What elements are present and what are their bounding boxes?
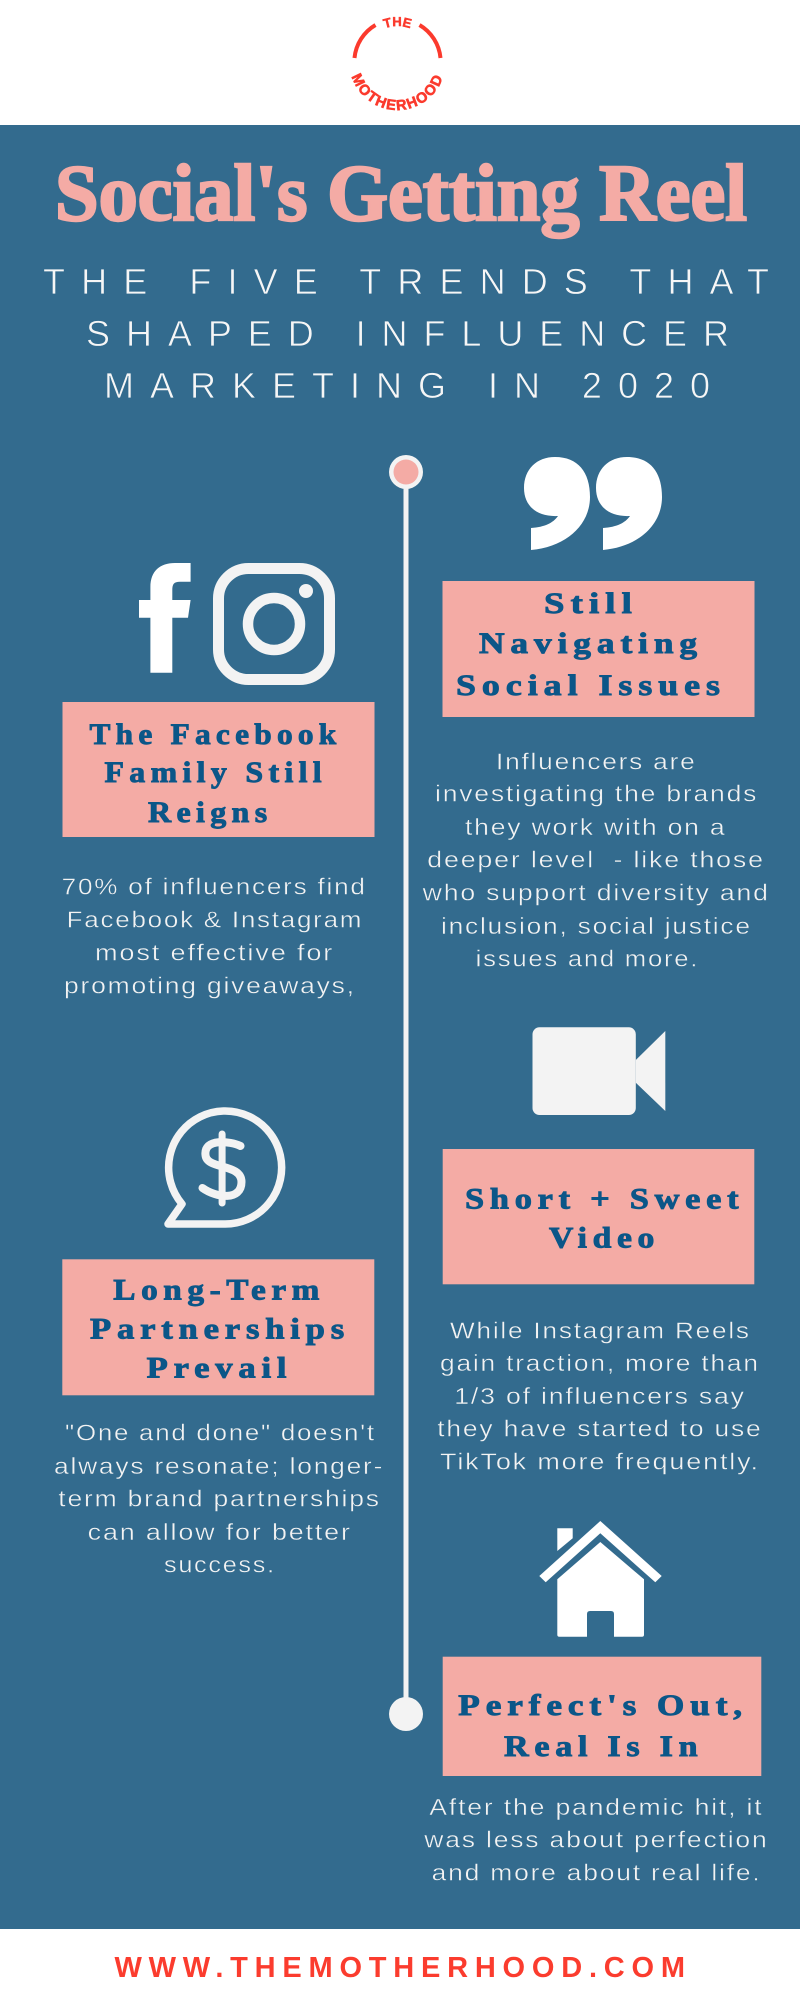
text: partnerships body: "One and done" doesn't — [65, 1420, 376, 1446]
text: Facebook body: 70% of influencers find — [62, 873, 367, 899]
logo: The Motherhood: MOTHERHOOD — [351, 72, 442, 111]
text: social issues body: who support diversity and — [422, 880, 770, 906]
text: real life body: was less about perfection — [423, 1827, 768, 1853]
text: partnerships body: always resonate; longer- — [54, 1453, 384, 1479]
panel: Facebook family — [62, 563, 374, 998]
panel: Perfect's Out, Real Is In — [423, 1521, 768, 1886]
icon: video camera — [532, 1027, 665, 1115]
text: partnerships body: can allow for better — [88, 1519, 352, 1545]
footer url: WWW.THEMOTHERHOOD.COM — [114, 1952, 685, 1984]
text: partnerships body — [54, 1420, 384, 1578]
heading box: The Facebook Family Still Reigns: Reigns — [148, 796, 272, 829]
heading box: The Facebook Family Still Reigns — [62, 702, 374, 837]
text: real life body — [423, 1794, 768, 1886]
text: partnerships body: success. — [164, 1552, 276, 1578]
subtitle: SHAPED INFLUENCER — [86, 313, 733, 354]
logo: The Motherhood: THE — [382, 16, 412, 28]
heading box: Still Navigating Social Issues: Social Issues — [456, 669, 726, 702]
heading box: Perfect's Out, Real Is In: Real Is In — [504, 1730, 703, 1763]
heading box: Short + Sweet Video: Video — [549, 1221, 660, 1254]
text: video body: gain traction, more than — [440, 1350, 760, 1376]
text: Facebook body: most effective for — [95, 940, 334, 966]
icon: quote marks — [524, 457, 662, 550]
timeline — [389, 455, 423, 1731]
subtitle: MARKETING IN 2020 — [104, 365, 714, 406]
subtitle: THE FIVE TRENDS THAT — [43, 261, 773, 302]
title: Social's Getting Reel — [55, 150, 747, 238]
text: social issues body: inclusion, social justice — [441, 913, 752, 939]
text: social issues body — [422, 748, 770, 972]
icon: instagram — [218, 568, 330, 680]
text: video body — [437, 1317, 762, 1474]
text: social issues body: issues and more. — [476, 946, 699, 972]
text: video body: While Instagram Reels — [450, 1317, 751, 1343]
heading box: Long-Term Partnerships Prevail: Partnerships — [90, 1312, 350, 1345]
heading box: The Facebook Family Still Reigns: Family Still — [104, 756, 327, 789]
icon: dollar speech bubble — [168, 1111, 282, 1224]
logo: The Motherhood — [351, 16, 442, 111]
heading box: Short + Sweet Video — [443, 1149, 754, 1284]
text: real life body: After the pandemic hit, it — [429, 1794, 764, 1820]
panel: Short + Sweet Video — [437, 1027, 762, 1474]
text: video body: TikTok more frequently. — [440, 1448, 760, 1474]
text: Facebook body: Facebook & Instagram — [67, 907, 363, 933]
text: real life body: and more about real life. — [432, 1860, 762, 1886]
icon: facebook — [139, 563, 191, 673]
text: social issues body: deeper level - like those — [427, 847, 765, 873]
text: Facebook body — [62, 873, 367, 998]
heading box: Still Navigating Social Issues: Navigating — [479, 627, 703, 660]
icon: house — [539, 1521, 662, 1637]
subtitle — [43, 261, 773, 406]
heading box: Still Navigating Social Issues — [442, 581, 754, 717]
heading box: Long-Term Partnerships Prevail: Long-Term — [113, 1273, 325, 1306]
text: video body: they have started to use — [437, 1416, 762, 1442]
text: partnerships body: term brand partnerships — [58, 1486, 381, 1512]
heading box: Long-Term Partnerships Prevail: Prevail — [147, 1351, 292, 1384]
heading box: Still Navigating Social Issues: Still — [544, 587, 638, 620]
text: Facebook body: promoting giveaways, — [64, 972, 356, 998]
heading box: Perfect's Out, Real Is In — [443, 1657, 761, 1776]
text: social issues body: they work with on a — [465, 814, 726, 840]
heading box: Perfect's Out, Real Is In: Perfect's Out, — [458, 1689, 748, 1722]
text: video body: 1/3 of influencers say — [454, 1383, 746, 1409]
heading box: Long-Term Partnerships Prevail — [62, 1259, 374, 1395]
panel: Long-Term Partnerships — [54, 1111, 384, 1578]
text: social issues body: Influencers are — [496, 748, 696, 774]
text: social issues body: investigating the brands — [435, 781, 758, 807]
panel: Social issues — [422, 457, 770, 972]
heading box: Short + Sweet Video: Short + Sweet — [465, 1182, 744, 1215]
heading box: The Facebook Family Still Reigns: The Facebook — [90, 718, 342, 751]
